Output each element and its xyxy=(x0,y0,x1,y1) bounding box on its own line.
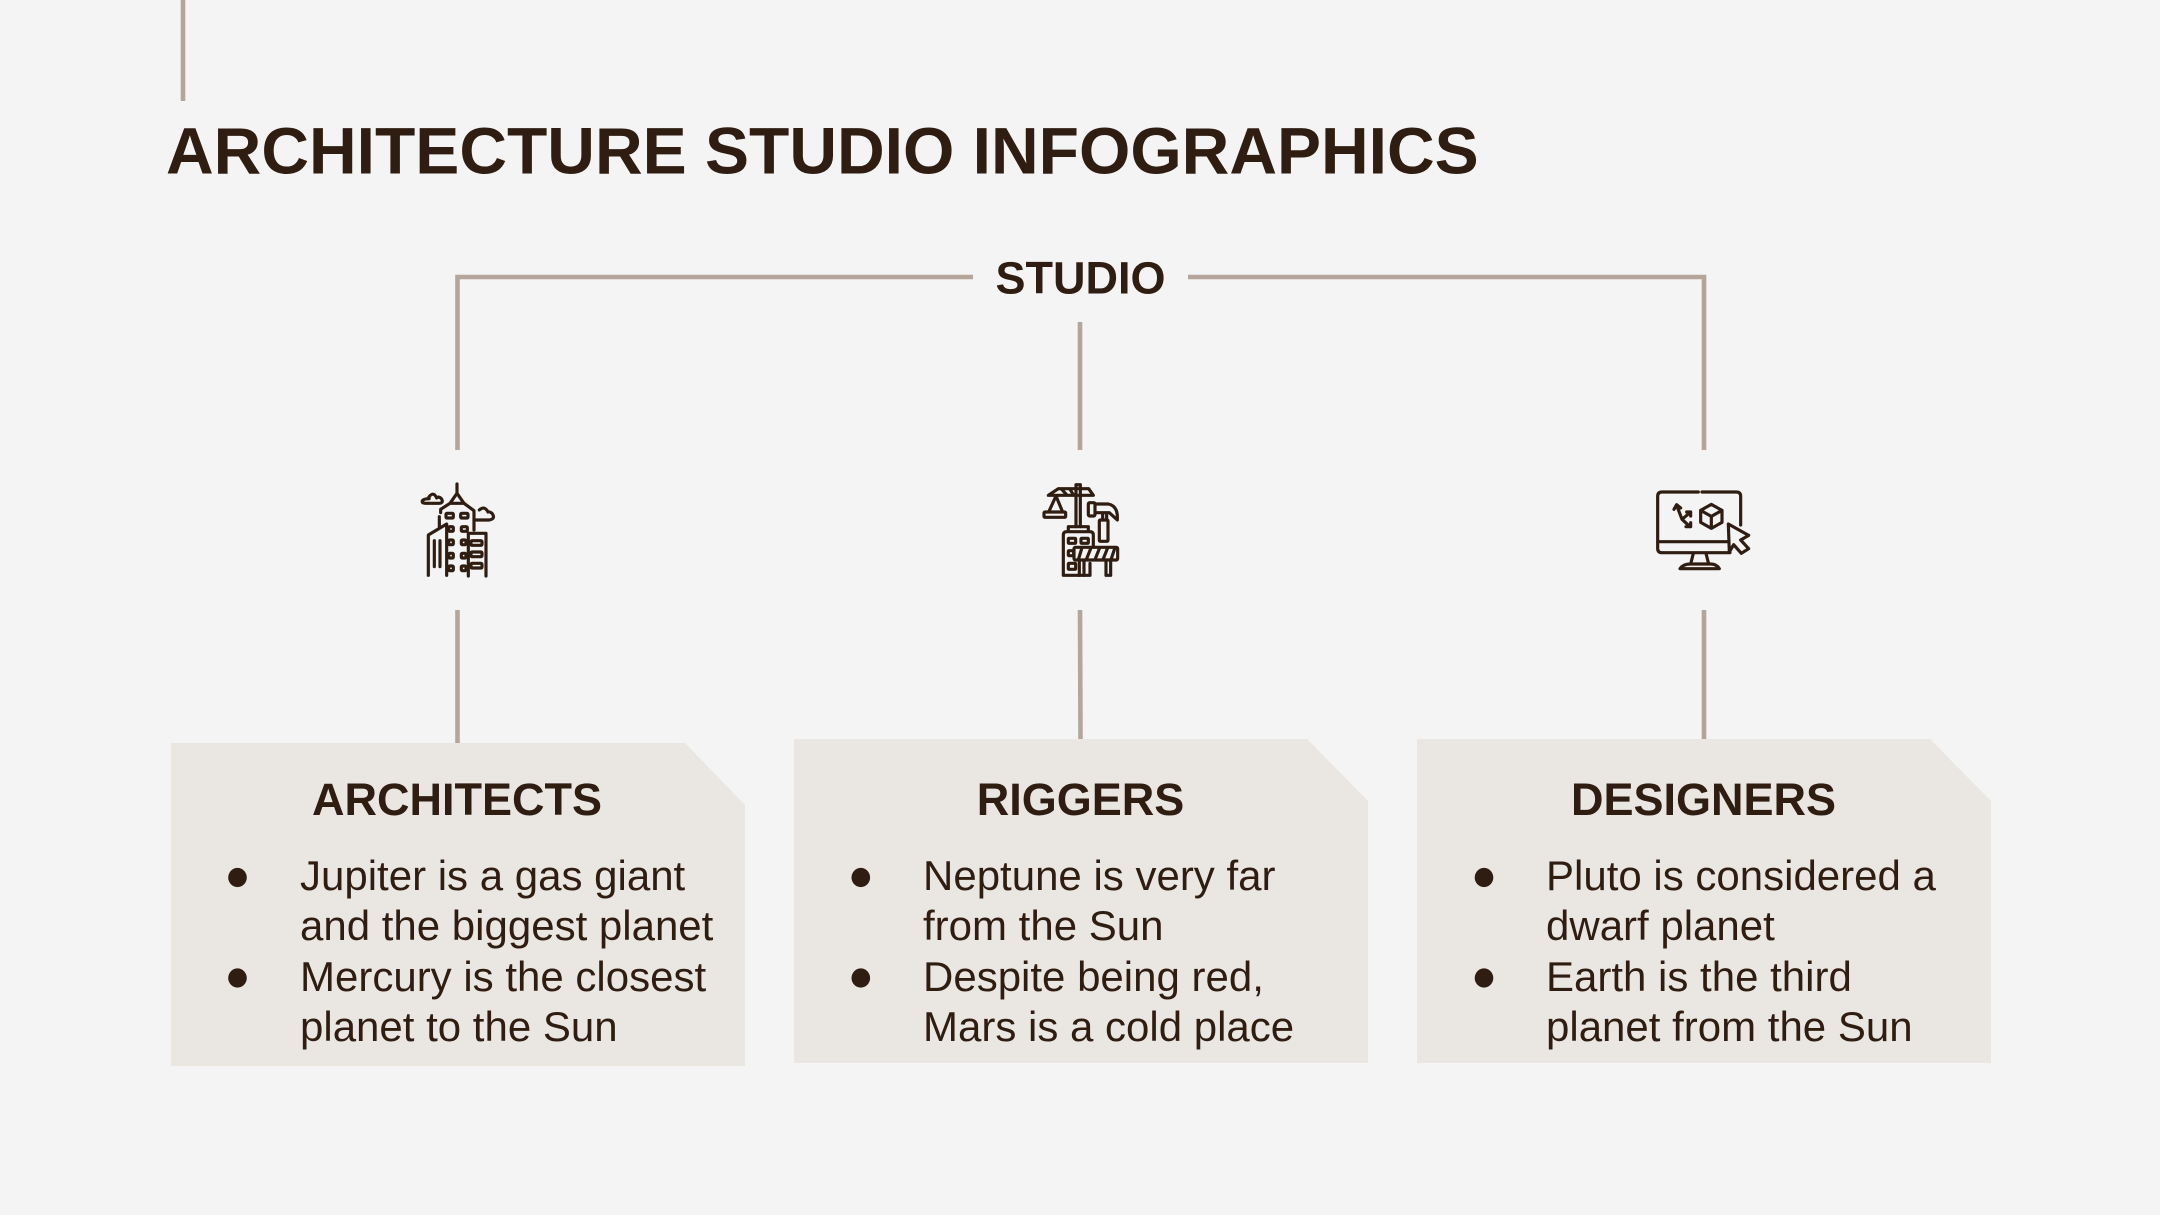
panel: architects xyxy=(171,743,745,1066)
icon: crane and construction xyxy=(1044,485,1118,575)
connector: riggers icon to card xyxy=(1078,610,1083,739)
bullet list: architects: Mercury is the closest xyxy=(300,953,706,1000)
connector: designers icon to card xyxy=(1702,610,1706,739)
icon: city buildings xyxy=(422,484,493,576)
bullet list: riggers: from the Sun xyxy=(923,902,1163,949)
connector: studio to designers xyxy=(1188,277,1704,450)
bullet list: architects: planet to the Sun xyxy=(300,1003,618,1050)
bullet list: riggers: Despite being red, xyxy=(923,953,1264,1000)
bullet list: riggers: Mars is a cold place xyxy=(923,1003,1294,1050)
card background xyxy=(794,739,1368,1063)
bullet list: designers: planet from the Sun xyxy=(1546,1003,1913,1050)
bullet list: architects: Jupiter is a gas giant xyxy=(300,852,686,899)
icon: computer-aided design monitor xyxy=(1658,492,1749,569)
heading: designers: DESIGNERS xyxy=(1571,774,1836,825)
card background xyxy=(1417,739,1991,1063)
connector: studio to riggers xyxy=(1078,322,1082,450)
heading: studio: STUDIO xyxy=(995,252,1166,304)
bullet list: designers xyxy=(1475,852,1937,1050)
bullet list: designers: Earth is the third xyxy=(1546,953,1852,1000)
panel: riggers xyxy=(794,739,1368,1063)
bullet list: designers: dwarf planet xyxy=(1546,902,1775,949)
connector: architects icon to card xyxy=(455,610,460,743)
accent line xyxy=(181,0,185,101)
title: ARCHITECTURE STUDIO INFOGRAPHICS xyxy=(166,114,1479,188)
heading: riggers: RIGGERS xyxy=(977,774,1184,825)
bullet list: architects xyxy=(228,852,714,1050)
panel: designers xyxy=(1417,739,1991,1063)
bullet list: riggers: Neptune is very far xyxy=(923,852,1276,899)
connector: studio to architects xyxy=(458,277,973,450)
bullet list: architects: and the biggest planet xyxy=(300,902,714,949)
card background xyxy=(171,743,745,1066)
bullet list: designers: Pluto is considered a xyxy=(1546,852,1937,899)
bullet list: riggers xyxy=(852,852,1294,1050)
heading: architects: ARCHITECTS xyxy=(312,774,602,825)
